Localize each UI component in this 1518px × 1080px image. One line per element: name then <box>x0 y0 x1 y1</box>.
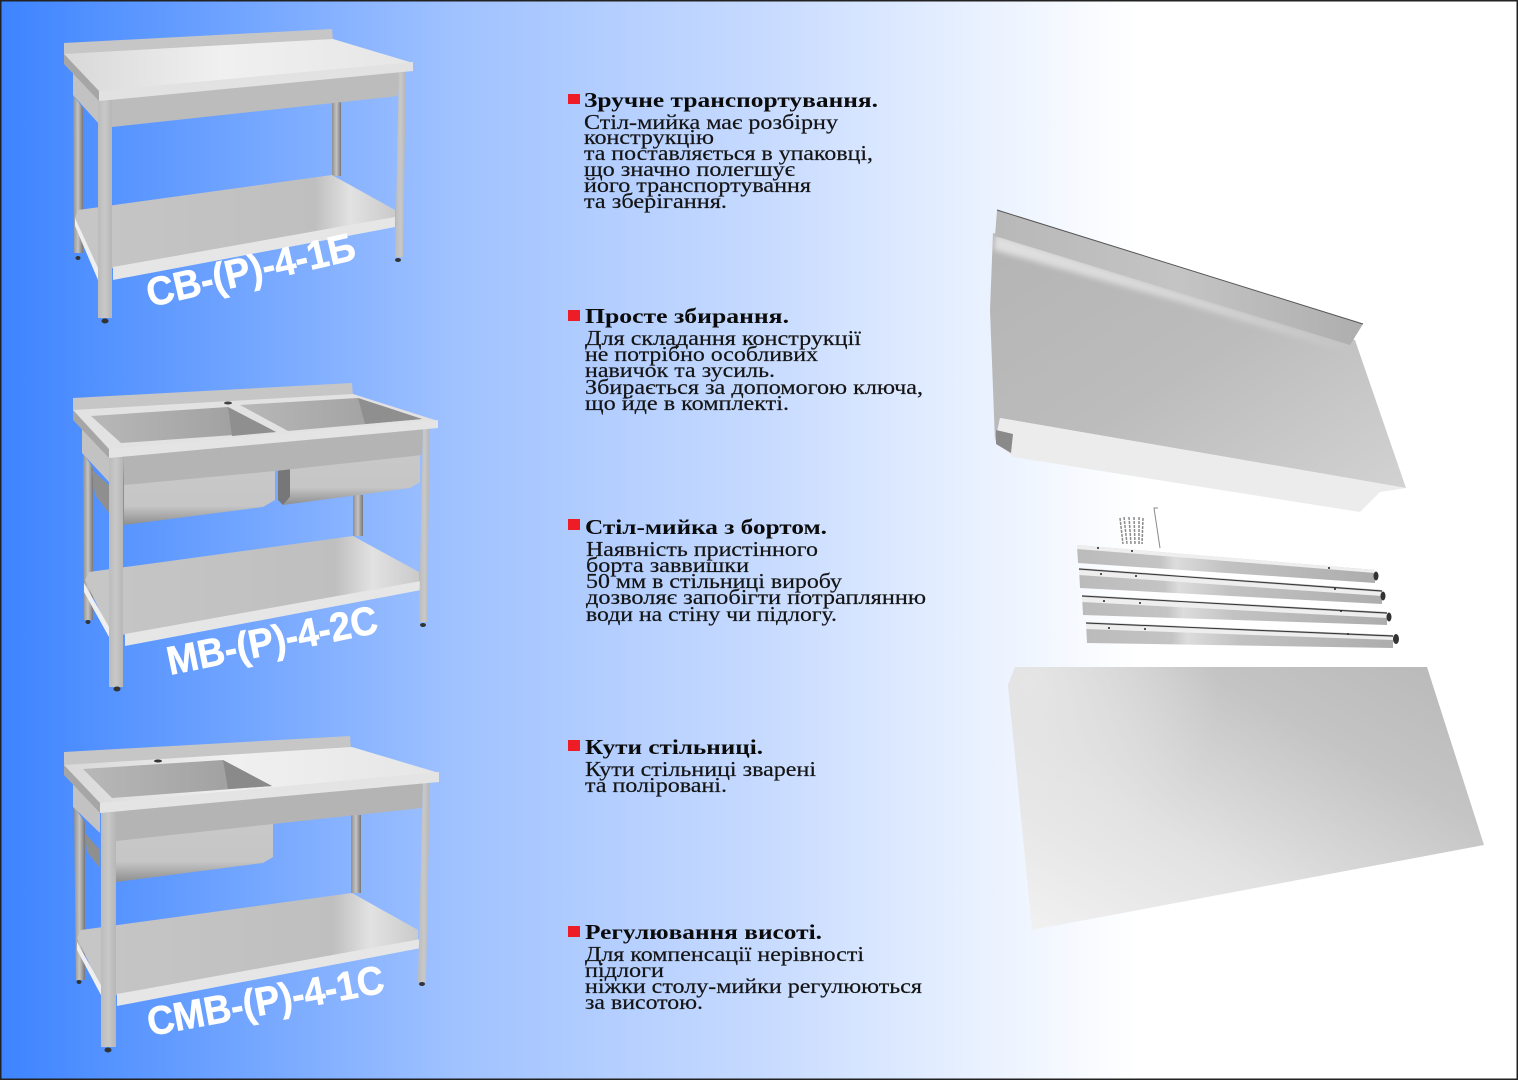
backsplash <box>64 736 351 768</box>
worktop front edge <box>100 772 439 813</box>
sink wall <box>223 760 272 789</box>
shelf left strip <box>75 218 98 280</box>
bottom shelf plate <box>1008 667 1484 930</box>
side apron <box>73 782 100 833</box>
bar caps <box>1374 572 1399 644</box>
worktop <box>64 39 413 95</box>
heading: Стіл-мийка з бортом. <box>585 515 827 539</box>
lower shelf <box>77 893 418 995</box>
top dark edge <box>997 210 1363 324</box>
feature: height <box>568 920 922 1014</box>
body text: Для компенсації нерівності <box>585 942 864 966</box>
panel: table МВ-(Р)-4-2С <box>73 383 438 692</box>
bullet <box>568 926 580 937</box>
leg bar 1 <box>1077 545 1375 583</box>
feature: transport <box>568 88 878 213</box>
back left leg <box>73 95 83 253</box>
feature: corners <box>568 735 816 797</box>
worktop left edge <box>64 54 99 101</box>
leg bar 2 <box>1079 568 1382 604</box>
disassembled worktop <box>990 210 1406 512</box>
worktop <box>64 747 439 807</box>
body text: та поставляється в упаковці, <box>584 141 873 165</box>
bowl <box>116 823 273 882</box>
backsplash <box>64 29 333 57</box>
body text: що йде в комплекті. <box>585 391 789 415</box>
body text: та поліровані. <box>585 773 727 797</box>
worktop <box>73 394 438 453</box>
left sink wall <box>228 407 276 436</box>
front left leg <box>101 811 116 1047</box>
left sink <box>91 407 276 443</box>
apron <box>112 70 400 127</box>
right bowl <box>283 454 420 505</box>
lower shelf <box>75 175 395 272</box>
bullet <box>568 310 580 321</box>
back right leg <box>353 495 363 536</box>
body text <box>586 537 926 626</box>
panel: table СВ-(Р)-4-1Б <box>64 29 413 324</box>
bowl gap <box>278 468 290 505</box>
feet <box>76 256 401 324</box>
back right leg <box>351 815 361 893</box>
heading: Кути стільниці. <box>585 735 763 759</box>
body text <box>585 757 816 797</box>
worktop front edge <box>109 420 438 458</box>
sink <box>83 760 272 798</box>
main surface <box>990 233 1406 488</box>
corner bracket <box>996 430 1013 453</box>
front right leg <box>419 427 430 622</box>
plate surface <box>1008 667 1484 930</box>
left bowl <box>124 470 275 525</box>
bolts <box>1120 517 1143 544</box>
body text: конструкцію <box>584 125 714 149</box>
body text: та зберігання. <box>584 189 727 213</box>
body text <box>584 110 873 213</box>
back right leg <box>332 102 341 176</box>
body text: навичок та зусиль. <box>585 358 775 382</box>
body text: за висотою. <box>585 990 703 1014</box>
body text: Стіл-мийка має розбірну <box>584 110 839 134</box>
apron <box>116 781 423 841</box>
shelf left strip <box>84 583 109 637</box>
body text: Кути стільниці зварені <box>585 757 816 781</box>
feature: assembly <box>568 304 923 415</box>
body text: борта заввишки <box>586 553 749 577</box>
model label: СВ-(Р)-4-1Б <box>142 225 360 316</box>
back left leg <box>74 807 85 980</box>
shelf left strip <box>77 942 102 997</box>
worktop front edge <box>99 62 413 101</box>
front left leg <box>98 99 112 318</box>
flange fold highlight <box>994 234 1350 352</box>
front strip <box>995 418 1406 512</box>
body text: Для складання конструкції <box>585 326 861 350</box>
feet <box>76 980 425 1052</box>
front left leg <box>109 456 123 687</box>
body text: що значно полегшує <box>584 157 795 181</box>
bar light top strips <box>1077 545 1393 640</box>
shelf front strip <box>125 581 421 646</box>
leg bars <box>1077 545 1399 648</box>
body text: не потрібно особливих <box>585 342 819 366</box>
shelf front strip <box>117 939 421 1006</box>
back left leg <box>83 453 93 620</box>
heading: Просте збирання. <box>585 304 789 328</box>
bullet <box>568 94 580 104</box>
side apron <box>82 429 109 482</box>
side bowl <box>85 833 100 868</box>
body text: Наявність пристінного <box>586 537 818 561</box>
heading: Регулювання висоті. <box>585 920 822 944</box>
bar top edges <box>1079 569 1393 636</box>
model label: МВ-(Р)-4-2С <box>163 598 381 684</box>
worktop left edge <box>73 410 109 458</box>
feature: backsplash <box>568 515 926 626</box>
apron <box>123 427 423 485</box>
shelf front strip <box>113 217 395 280</box>
backsplash <box>73 383 353 412</box>
faucet hole <box>224 402 232 404</box>
right sink wall <box>358 398 422 424</box>
lower shelf <box>85 536 419 635</box>
faucet hole <box>154 760 162 762</box>
body text: Збирається за допомогою ключа, <box>585 375 923 399</box>
bullet <box>568 519 580 530</box>
side bowl <box>92 470 109 513</box>
feet <box>86 620 426 692</box>
bullet <box>568 740 580 751</box>
front right leg <box>418 781 430 982</box>
bar screw holes <box>1097 547 1349 635</box>
body text: води на стіну чи підлогу. <box>586 602 837 626</box>
fastening bolts and key <box>1120 508 1160 548</box>
back flange <box>995 210 1363 345</box>
body text <box>585 326 923 415</box>
model label: СМВ-(Р)-4-1С <box>144 958 388 1045</box>
body text: підлоги <box>585 958 664 982</box>
heading: Зручне транспортування. <box>584 88 878 112</box>
body text: ніжки столу-мийки регулюються <box>585 974 922 998</box>
body text: 50 мм в стільниці виробу <box>586 569 843 593</box>
body text: його транспортування <box>584 173 811 197</box>
body text <box>585 942 922 1014</box>
right sink <box>240 398 422 431</box>
panel: table СМВ-(Р)-4-1С <box>64 736 439 1052</box>
plate top-left light area <box>1008 667 1484 930</box>
front right leg <box>395 70 406 257</box>
leg bar 4 <box>1086 622 1393 648</box>
side apron <box>73 72 99 124</box>
body text: дозволяє запобігти потраплянню <box>586 585 926 609</box>
worktop left edge <box>64 765 100 813</box>
leg bar 3 <box>1082 595 1387 625</box>
hex key <box>1154 508 1160 548</box>
